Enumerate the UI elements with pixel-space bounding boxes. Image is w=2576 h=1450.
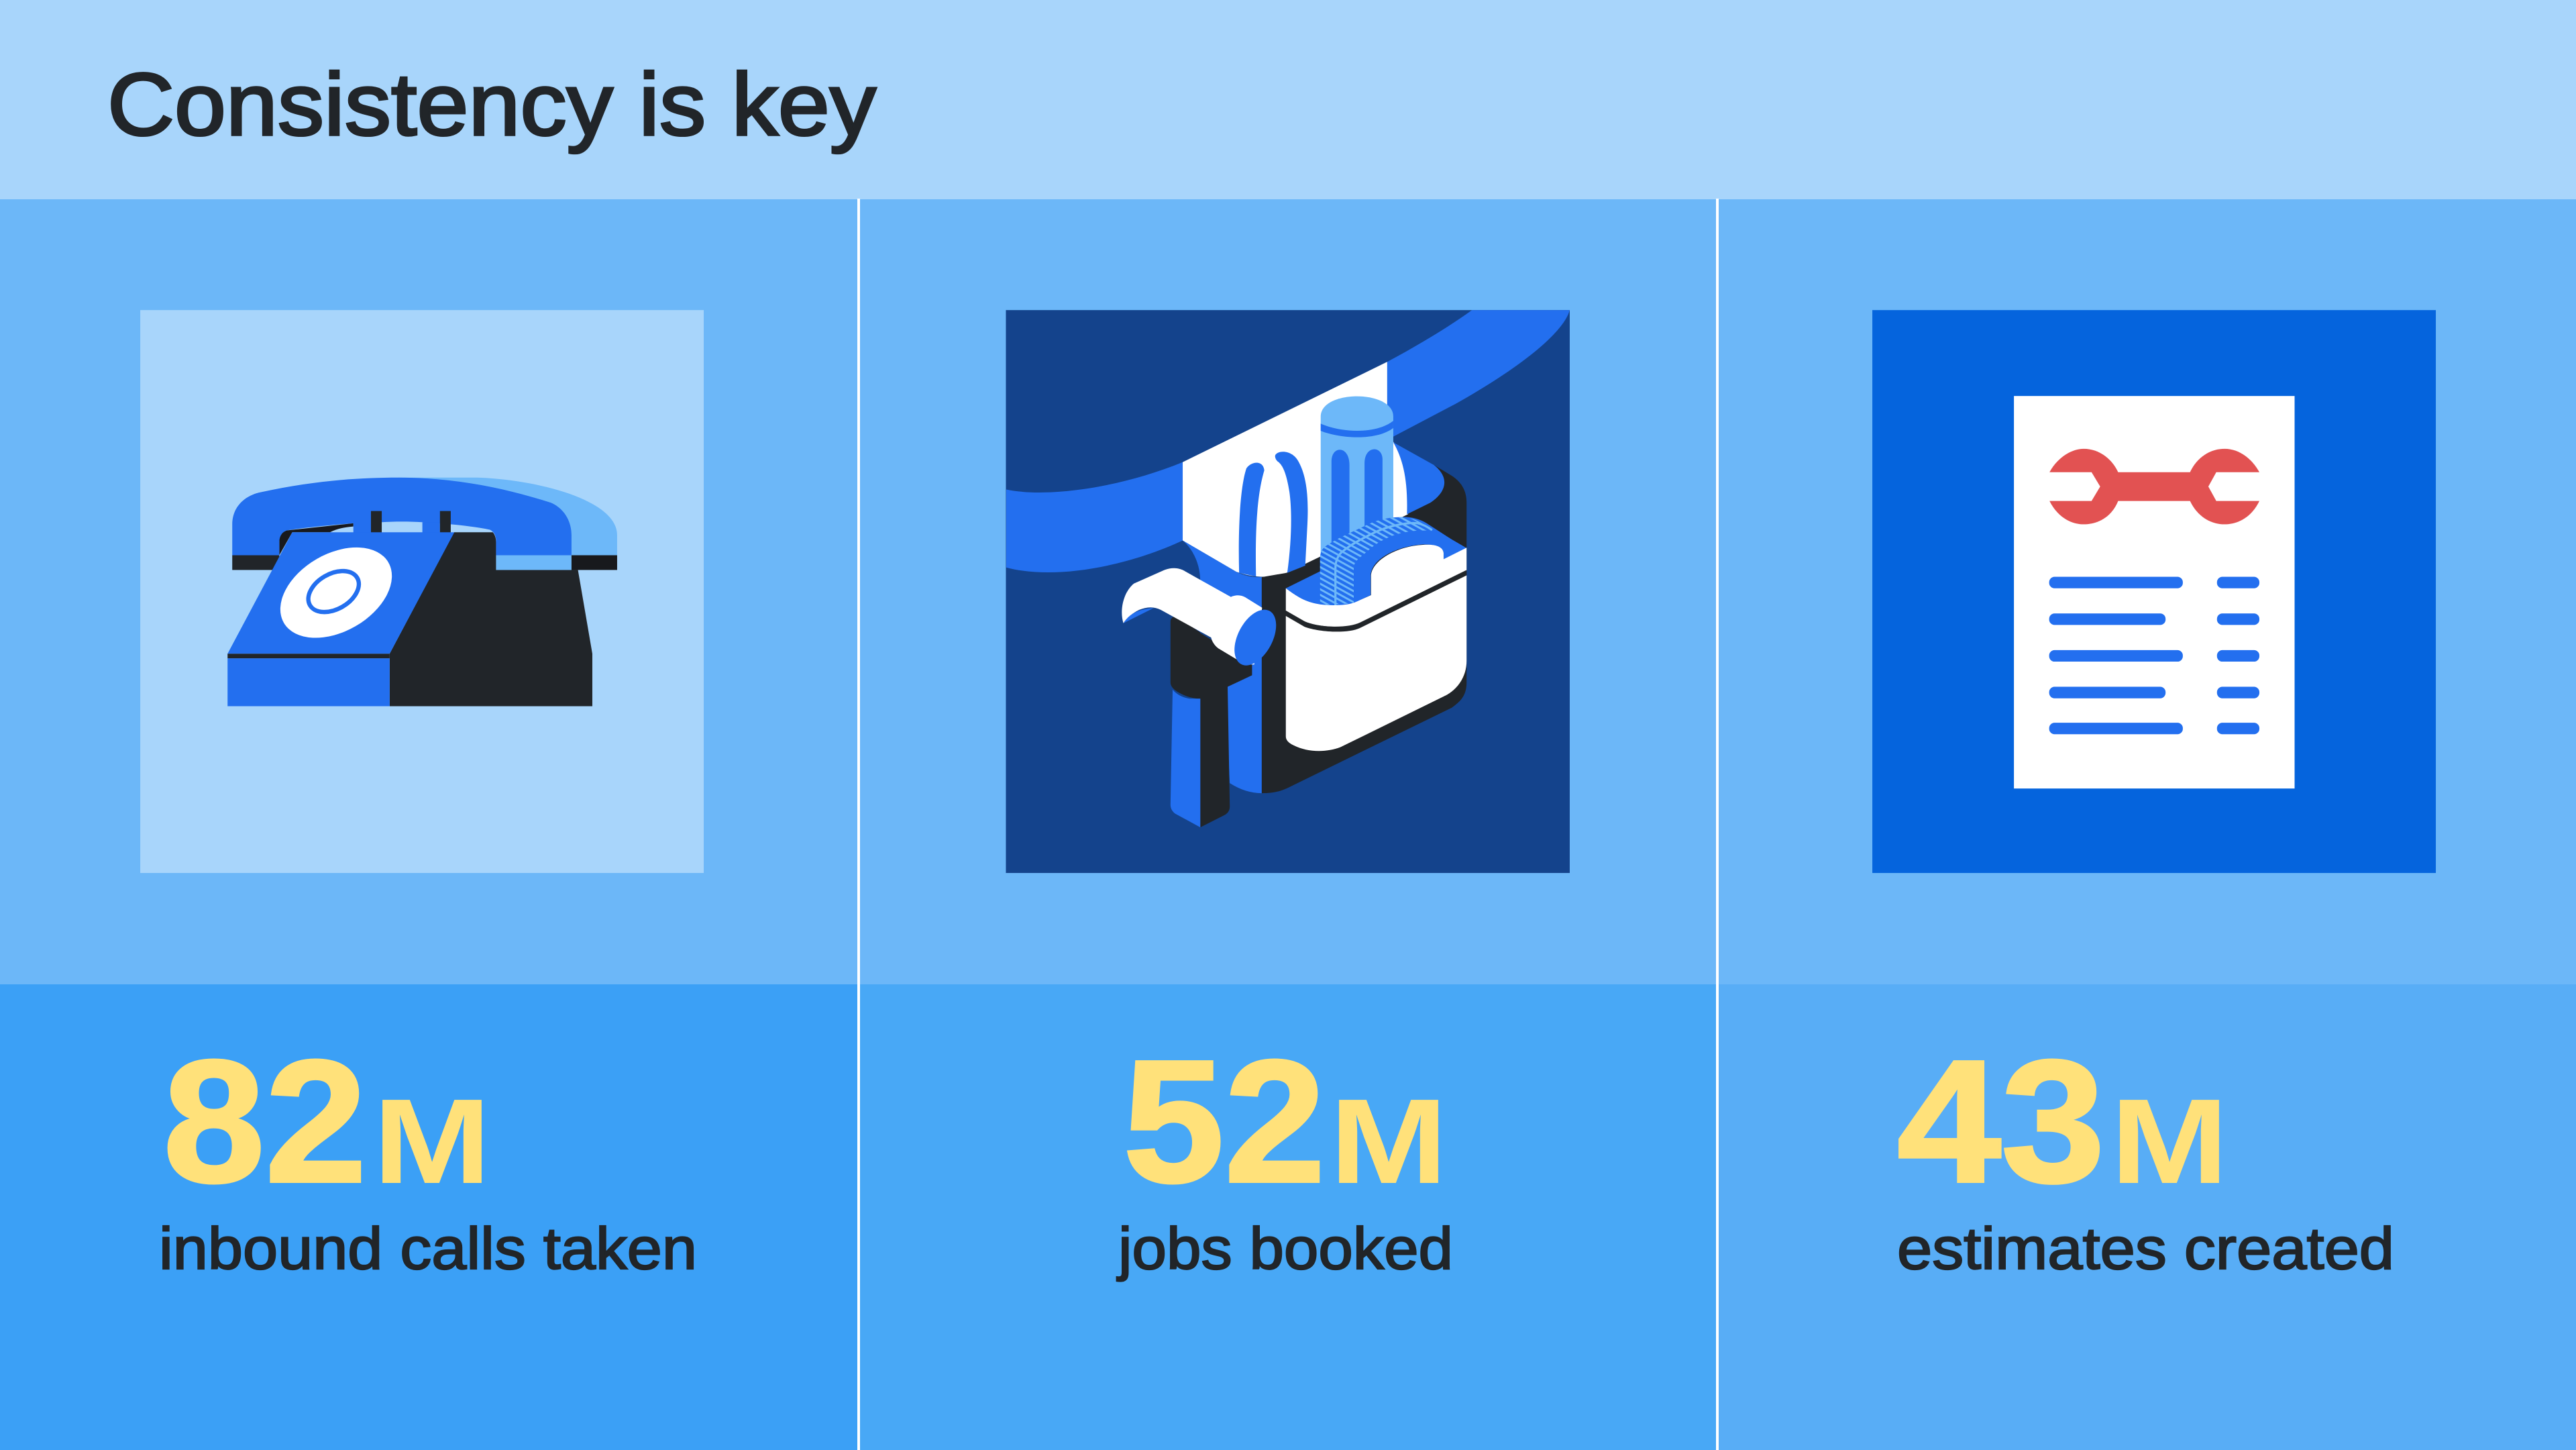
label: jobs booked: jobs booked xyxy=(1116,1215,1453,1282)
stat: 82M xyxy=(163,1025,491,1219)
title: Consistency is key xyxy=(107,55,876,154)
estimate line items xyxy=(2049,577,2259,734)
stat: 43M: 43 xyxy=(1897,1025,2105,1219)
stat: 52M: 52 xyxy=(1123,1025,1326,1219)
stat: 52M xyxy=(1123,1025,1448,1219)
screwdriver xyxy=(1321,397,1393,560)
stat: 82M: 82 xyxy=(163,1025,367,1219)
illustration tile: tool belt xyxy=(1006,310,1570,873)
label: estimates created: estimates created xyxy=(1897,1215,2394,1282)
icon: telephone xyxy=(227,478,617,706)
panel: jobs booked xyxy=(860,199,1716,1450)
label: inbound calls taken: inbound calls taken xyxy=(159,1215,697,1282)
panel: estimates created xyxy=(1719,199,2576,1450)
pouch front xyxy=(1286,545,1466,751)
icon: wrench xyxy=(2049,449,2259,524)
panel: inbound calls xyxy=(0,199,858,1450)
pliers xyxy=(1239,452,1307,576)
hammer xyxy=(1122,568,1285,827)
illustration tile: telephone xyxy=(140,310,704,873)
stat: 43M xyxy=(1897,1025,2229,1219)
stat: 43M: M xyxy=(2110,1074,2229,1209)
stat: 82M: M xyxy=(373,1074,491,1209)
illustration tile: estimate document xyxy=(1872,310,2436,873)
icon: estimate document xyxy=(2014,396,2295,788)
header band xyxy=(0,0,2576,199)
icon: tool belt xyxy=(1006,310,1570,827)
tape measure xyxy=(1286,513,1466,611)
stat: 52M: M xyxy=(1330,1074,1448,1209)
